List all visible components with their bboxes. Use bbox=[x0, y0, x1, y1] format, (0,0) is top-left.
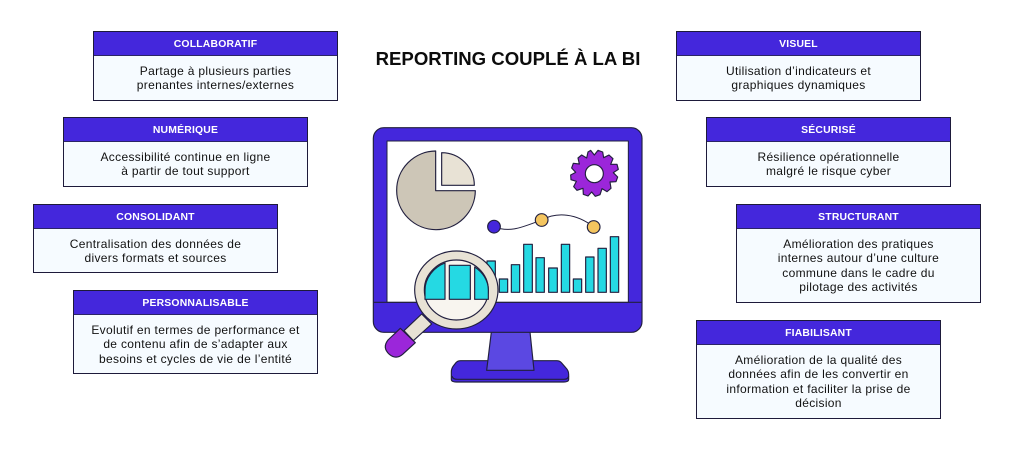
heading: fiabilisant bbox=[697, 321, 940, 345]
title: REPORTING COUPLÉ À LA BI bbox=[376, 48, 640, 69]
card: numérique bbox=[63, 117, 308, 187]
text: numérique bbox=[100, 150, 270, 178]
heading: fiabilisant: FIABILISANT bbox=[785, 328, 852, 339]
heading: consolidant bbox=[34, 205, 277, 229]
text: structurant bbox=[778, 237, 939, 294]
heading: sécurisé bbox=[707, 118, 950, 142]
text: collaboratif: Partage à plusieurs parties bbox=[140, 64, 291, 78]
magnifying glass bbox=[385, 251, 498, 357]
text: consolidant: divers formats et sources bbox=[84, 251, 227, 265]
text: numérique: Accessibilité continue en ligne bbox=[100, 150, 270, 164]
text: visuel: Utilisation d’indicateurs et bbox=[726, 64, 871, 78]
bar chart bbox=[487, 237, 619, 292]
text: fiabilisant bbox=[726, 353, 911, 410]
text: fiabilisant: décision bbox=[795, 396, 842, 410]
card: consolidant bbox=[33, 204, 278, 273]
card: fiabilisant bbox=[696, 320, 941, 419]
text: personnalisable bbox=[91, 323, 300, 366]
text: collaboratif bbox=[137, 64, 294, 92]
monitor illustration bbox=[373, 128, 642, 382]
text: visuel: graphiques dynamiques bbox=[731, 78, 866, 92]
monitor body bbox=[373, 128, 642, 332]
heading: personnalisable: PERSONNALISABLE bbox=[142, 298, 249, 309]
text: personnalisable: Evolutif en termes de performance et bbox=[91, 323, 300, 337]
text: personnalisable: de contenu afin de s’adapter aux bbox=[103, 337, 288, 351]
text: fiabilisant: information et faciliter la prise de bbox=[726, 382, 911, 396]
heading: collaboratif: COLLABORATIF bbox=[174, 39, 257, 50]
text: consolidant bbox=[70, 237, 241, 265]
heading: structurant bbox=[737, 205, 980, 229]
heading: structurant: STRUCTURANT bbox=[818, 212, 899, 223]
heading: visuel: VISUEL bbox=[779, 39, 818, 50]
heading: collaboratif bbox=[94, 32, 337, 56]
card: collaboratif bbox=[93, 31, 338, 101]
heading: personnalisable bbox=[74, 291, 317, 315]
text: structurant: internes autour d’une culture bbox=[778, 251, 939, 265]
text: personnalisable: besoins et cycles de vie de l’entité bbox=[99, 352, 292, 366]
pie chart bbox=[397, 151, 475, 230]
card: sécurisé bbox=[706, 117, 951, 187]
card: visuel bbox=[676, 31, 921, 101]
text: fiabilisant: Amélioration de la qualité des bbox=[735, 353, 902, 367]
heading: consolidant: CONSOLIDANT bbox=[116, 212, 195, 223]
text: consolidant: Centralisation des données de bbox=[70, 237, 241, 251]
text: structurant: commune dans le cadre du bbox=[782, 266, 935, 280]
text: collaboratif: prenantes internes/externes bbox=[137, 78, 294, 92]
text: numérique: à partir de tout support bbox=[121, 164, 250, 178]
text: structurant: pilotage des activités bbox=[799, 280, 918, 294]
monitor stand bbox=[451, 332, 569, 382]
card: structurant bbox=[736, 204, 981, 303]
text: structurant: Amélioration des pratiques bbox=[783, 237, 934, 251]
heading: numérique bbox=[64, 118, 307, 142]
heading: numérique: NUMÉRIQUE bbox=[153, 125, 218, 136]
line with dots bbox=[488, 214, 600, 233]
heading: visuel bbox=[677, 32, 920, 56]
icon: gear bbox=[571, 150, 618, 196]
text: fiabilisant: données afin de les convertir en bbox=[728, 367, 909, 381]
card: personnalisable bbox=[73, 290, 318, 374]
heading: sécurisé: SÉCURISÉ bbox=[801, 125, 856, 136]
text: visuel bbox=[726, 64, 871, 92]
text: sécurisé: malgré le risque cyber bbox=[766, 164, 891, 178]
text: sécurisé: Résilience opérationnelle bbox=[757, 150, 900, 164]
text: sécurisé bbox=[757, 150, 900, 178]
